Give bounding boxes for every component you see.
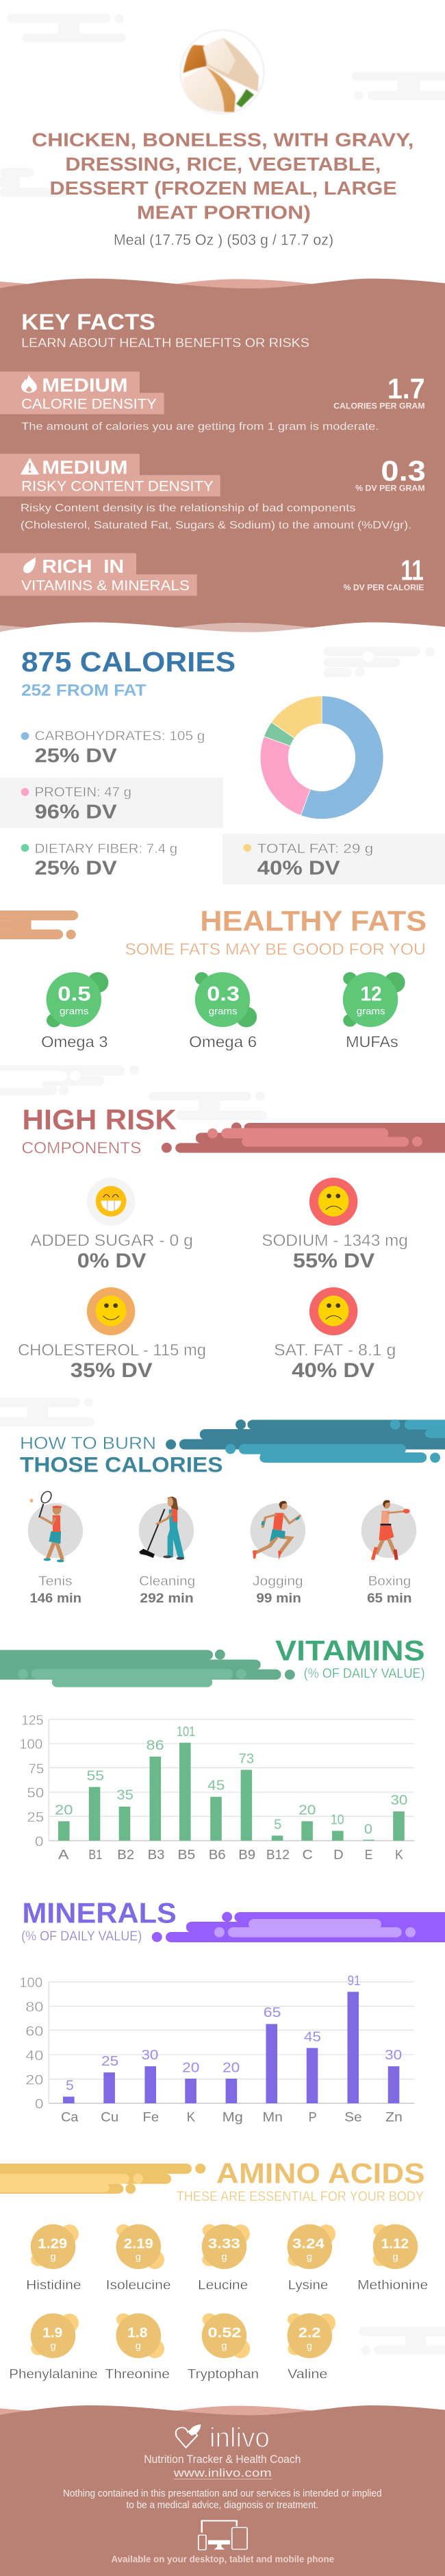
stat: histidine: 1.29 [38,2236,67,2251]
legend: protein [0,778,223,828]
heading: key facts [21,310,309,350]
risk: added sugar: ADDED SUGAR - 0 g [30,1230,193,1250]
heading: healthy fats [125,904,427,958]
icon: person sweeping [139,1497,184,1560]
decorative banner: teal [166,1420,445,1463]
heading: calories: 875 CALORIES [21,646,236,678]
stat: tryptophan [188,2314,259,2381]
donut chart [260,696,383,819]
bar chart: vitamins: 125 [21,1713,43,1728]
bar chart: minerals: 20 [25,2072,43,2088]
bar chart: minerals: 25 [101,2053,118,2068]
icon: sad face [309,1287,357,1335]
bar chart: minerals: Fe [143,2109,159,2125]
stat: phenylalanine: 1.9 [42,2325,62,2340]
icon: runner [253,1501,301,1560]
bar chart: vitamins: 86 [147,1737,164,1753]
bar chart: minerals: 30 [141,2046,158,2062]
icon: grinning face [87,1178,135,1226]
tagline and url: Nutrition Tracker & Health Coach [144,2453,301,2466]
stat: tryptophan: Tryptophan [188,2366,259,2381]
disclaimer: to be a medical advice, diagnosis or treatment. [126,2500,318,2511]
stat: leucine: g [221,2252,227,2262]
stat: isoleucine [106,2225,171,2292]
fact: risky content density: MEDIUM [42,457,128,478]
risk: cholesterol: 35% DV [71,1359,153,1382]
panel: calories [0,646,445,884]
fact: calorie density: MEDIUM [42,375,128,396]
stat: mufas: MUFAs [346,1034,398,1051]
activity: tennis: 146 min [30,1590,81,1605]
stat: phenylalanine: g [50,2341,56,2351]
stat: histidine: g [50,2252,56,2262]
stat: omega 6: Omega 6 [189,1034,257,1051]
stat: tryptophan: g [221,2341,227,2351]
stat: omega 6 [189,972,257,1051]
stat: tryptophan: 0.52 [207,2325,241,2340]
fact: calorie density: The amount of calories you are getting from 1 gram is moderate. [21,420,379,432]
heading: minerals: MINERALS [22,1897,177,1929]
stat: mufas: grams [357,1006,385,1017]
tagline and url [144,2453,301,2479]
icon: sad face [309,1178,357,1226]
bar chart: vitamins: 75 [28,1761,44,1776]
panel: amino acids [0,2157,445,2381]
bar chart: minerals: 30 [385,2046,402,2062]
bar chart: vitamins: 25 [27,1809,44,1824]
bar chart: minerals: 40 [25,2048,43,2063]
stat: methionine: Methionine [357,2277,428,2292]
bar chart: vitamins: 101 [177,1723,195,1739]
heading: key facts: KEY FACTS [21,310,155,334]
heading: vitamins [275,1634,425,1681]
heading: high risk: COMPONENTS [22,1138,141,1157]
heading: minerals: (% OF DAILY VALUE) [21,1929,142,1944]
stat: threonine: 1.8 [127,2325,148,2340]
bar chart: minerals: 100 [19,1975,42,1990]
heading: key facts: LEARN ABOUT HEALTH BENEFITS OR RISKS [21,336,309,350]
stat: leucine: 3.33 [208,2236,240,2251]
heading: high risk: HIGH RISK [22,1103,177,1135]
stat: lysine: Lysine [288,2277,328,2292]
stat: isoleucine: g [136,2252,141,2262]
legend: dietary fiber [21,841,177,879]
availability note: Available on your desktop, tablet and mobile phone [112,2554,334,2565]
stat: valine: 2.2 [298,2325,321,2340]
fact: calorie density: CALORIES PER GRAM [333,401,425,410]
heading: high risk [22,1103,177,1157]
activity: boxing: 65 min [367,1590,412,1605]
activity: boxing [361,1500,416,1605]
bar chart: minerals: K [187,2110,196,2125]
bar chart: vitamins [19,1713,414,1862]
panel: key facts [0,279,445,639]
risk: sodium [262,1178,408,1272]
legend: carbohydrates: 25% DV [35,745,117,767]
panel: minerals [19,1897,445,2125]
bar chart: vitamins: D [333,1847,344,1862]
fact: risky content density [0,454,426,531]
bar chart: minerals: Zn [385,2109,403,2125]
bar chart: vitamins: 100 [19,1737,42,1752]
bar chart: vitamins: C [303,1847,313,1862]
legend: protein: 96% DV [35,801,117,823]
title: DRESSING, RICE, VEGETABLE, [65,153,381,175]
stat: valine: Valine [288,2366,327,2381]
bar chart: minerals: Cu [101,2109,118,2125]
bar chart: vitamins: A [58,1847,69,1862]
bar chart: vitamins: 30 [390,1792,407,1807]
stat: isoleucine: 2.19 [124,2236,153,2251]
stat: methionine [357,2225,428,2292]
bar chart: minerals: P [309,2109,317,2125]
bar chart: vitamins: B1 [88,1847,102,1862]
stat: lysine: 3.24 [292,2236,325,2251]
bar chart: minerals: 20 [222,2059,240,2075]
legend: total fat: TOTAL FAT: 29 g [257,841,373,856]
stat: threonine: Threonine [105,2366,170,2381]
heading: how to burn: THOSE CALORIES [20,1453,222,1476]
decorative banner: purple [152,1912,445,1942]
icon: warning triangle [21,458,39,475]
risk: sodium: SODIUM - 1343 mg [262,1230,408,1250]
bar chart: vitamins: 73 [239,1750,254,1766]
bar chart: minerals: 80 [25,1999,43,2014]
bar chart: vitamins: 45 [207,1777,225,1793]
decorative banner: green [0,1650,295,1687]
header panel [31,30,414,249]
stat: histidine [26,2225,81,2292]
bar chart: vitamins: 20 [55,1802,73,1818]
risk: cholesterol: CHOLESTEROL - 115 mg [18,1340,206,1359]
activity: jogging: 99 min [256,1590,301,1605]
bar chart: vitamins: B9 [238,1847,255,1862]
fact: rich in vitamins and minerals: 11 [400,554,424,586]
icon: flame [21,375,37,393]
bar chart: vitamins: B6 [209,1847,226,1862]
activity: cleaning: Cleaning [139,1573,195,1588]
stat: omega 3: grams [60,1006,88,1017]
bar chart: minerals: 0 [35,2096,43,2111]
heading: calories [21,646,236,699]
legend: dietary fiber: 25% DV [35,857,117,879]
bar chart: vitamins: 20 [298,1802,316,1818]
bar chart: minerals: 45 [304,2029,321,2044]
legend: carbohydrates: CARBOHYDRATES: 105 g [35,728,205,743]
stat: omega 3 [41,972,108,1051]
fact: rich in vitamins and minerals: % DV PER CALORIE [344,583,424,592]
bar chart: minerals: Mg [222,2109,243,2125]
legend: dietary fiber: DIETARY FIBER: 7.4 g [35,841,177,856]
panel: how to burn those calories [20,1420,445,1605]
heading: minerals [21,1897,177,1944]
stat: omega 6: grams [209,1006,238,1017]
icon: leaf [23,557,36,573]
fact: risky content density: RISKY CONTENT DENSITY [21,478,214,495]
risk: sodium: 55% DV [293,1250,374,1272]
stat: leucine: Leucine [198,2277,248,2292]
bar chart: minerals: 91 [347,1973,361,1989]
panel: footer [0,2405,445,2576]
tagline and url: www.inlivo.com [173,2466,272,2479]
legend: total fat: 40% DV [257,857,340,879]
fact: rich in vitamins and minerals [0,553,424,596]
bar chart: vitamins: 5 [274,1816,281,1832]
food image: chicken [181,30,264,114]
stat: phenylalanine: Phenylalanine [9,2366,98,2381]
stat: omega 3: Omega 3 [41,1034,108,1051]
risk: saturated fat [274,1287,396,1382]
stat: phenylalanine [9,2314,98,2381]
title: CHICKEN, BONELESS, WITH GRAVY, [31,129,414,151]
legend: total fat [222,834,445,884]
heading: calories: 252 FROM FAT [21,681,147,699]
legend: protein: PROTEIN: 47 g [35,784,131,800]
title: DESSERT (FROZEN MEAL, LARGE [50,177,397,199]
bar chart: vitamins: 0 [364,1821,372,1837]
activity: boxing: Boxing [368,1573,411,1588]
stat: leucine [198,2225,250,2292]
icon: smiling face [87,1287,135,1335]
fact: calorie density: CALORIE DENSITY [21,396,157,412]
bar chart: vitamins: B2 [117,1848,134,1862]
bar chart: vitamins: 50 [27,1785,44,1800]
activity: jogging: Jogging [253,1573,303,1588]
bar chart: minerals: Se [344,2109,362,2125]
panel: vitamins [0,1634,425,1862]
bar chart: vitamins: B3 [148,1847,164,1862]
fact: rich in vitamins and minerals: RICH IN [42,556,124,577]
icon: tennis player [30,1490,64,1562]
stat: omega 3: 0.5 [58,983,91,1006]
risk: saturated fat: 40% DV [292,1359,374,1382]
fact: risky content density: Risky Content density is the relationship of bad components [21,501,356,514]
bar chart: minerals: 65 [264,2004,281,2020]
fact: calorie density: 1.7 [387,373,425,405]
fact: calorie density [0,371,425,432]
stat: isoleucine: Isoleucine [106,2277,171,2292]
icon: boxer [372,1500,410,1560]
bar chart: vitamins: K [395,1846,403,1862]
legend: carbohydrates [21,728,205,767]
activity: tennis: Tenis [38,1573,73,1588]
stat: mufas [343,972,405,1051]
decorative banner: red [162,1122,445,1153]
panel: healthy fats [0,904,427,1120]
bar chart: minerals: 5 [66,2077,74,2093]
decorative banner: yellow [0,2164,205,2194]
risk: saturated fat: SAT. FAT - 8.1 g [274,1340,396,1359]
bar chart: minerals [19,1973,414,2125]
bar chart: vitamins: 10 [331,1812,344,1828]
stat: threonine [105,2314,170,2381]
heading: amino acids [177,2157,425,2204]
icon: devices [199,2521,247,2550]
logo: inlivo [176,2422,270,2453]
stat: valine [288,2314,335,2381]
title [31,129,414,223]
heading: how to burn [20,1434,222,1476]
decorative banner: orange [0,911,78,939]
bar chart: minerals: Mn [262,2109,283,2125]
risk: added sugar: 0% DV [77,1250,147,1272]
disclaimer [63,2488,382,2511]
bar chart: vitamins: 55 [86,1768,104,1783]
stat: omega 6: 0.3 [207,983,240,1006]
stat: lysine [288,2225,335,2292]
bar chart: vitamins: B12 [266,1848,290,1862]
risk: added sugar [30,1178,193,1272]
activity: cleaning: 292 min [140,1590,194,1605]
heading: vitamins: VITAMINS [275,1634,425,1666]
logo: inlivo: inlivo [209,2422,270,2453]
stat: valine: g [307,2341,312,2351]
serving size: Meal (17.75 Oz ) (503 g / 17.7 oz) [114,232,333,249]
bar chart: vitamins: E [365,1846,372,1862]
panel: high risk [0,1103,445,1426]
bar chart: minerals: Ca [61,2109,79,2125]
stat: threonine: g [136,2341,141,2351]
bar chart: minerals: 60 [25,2024,43,2039]
stat: lysine: g [307,2252,312,2262]
activity: jogging [251,1501,305,1605]
activity: tennis [28,1490,83,1605]
bar chart: vitamins: 0 [35,1834,43,1849]
fact: risky content density: 0.3 [381,455,426,487]
stat: mufas: 12 [361,983,382,1006]
title: MEAT PORTION) [137,201,311,223]
stat: methionine: 1.12 [381,2236,409,2251]
risk: cholesterol [18,1287,206,1382]
bar chart: vitamins: 35 [116,1787,134,1803]
bar chart: minerals: 20 [182,2059,199,2075]
fact: rich in vitamins and minerals: VITAMINS & MINERALS [21,578,190,594]
fact: risky content density: % DV PER GRAM [355,484,425,493]
activity: cleaning [139,1497,195,1605]
stat: methionine: g [392,2252,398,2262]
stat: histidine: Histidine [26,2277,81,2292]
bar chart: vitamins: B5 [178,1847,195,1862]
heading: how to burn: HOW TO BURN [20,1434,156,1453]
fact: risky content density: (Cholesterol, Saturated Fat, Sugars & Sodium) to the amount (%DV/gr). [21,519,411,531]
